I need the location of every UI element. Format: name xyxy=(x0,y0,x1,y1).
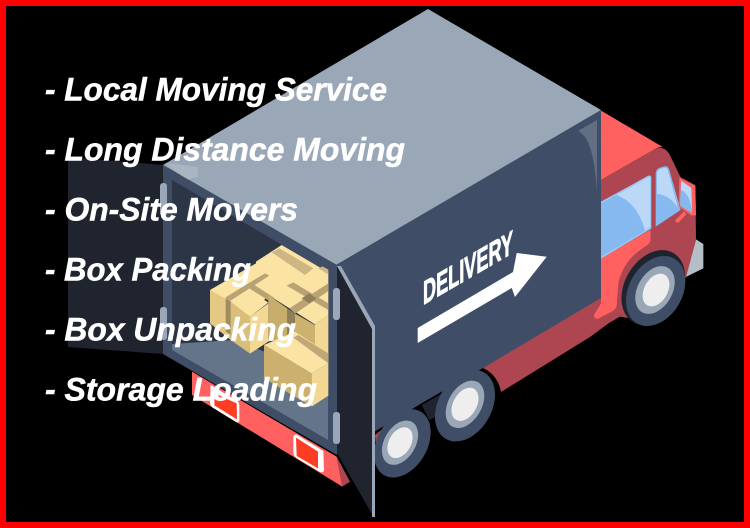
box: left face xyxy=(210,290,231,340)
item: long distance: - Long Distance Moving xyxy=(45,132,405,168)
cargo floor xyxy=(172,340,328,440)
panel highlight xyxy=(578,120,597,192)
box: center faces xyxy=(268,295,287,342)
right open door xyxy=(337,266,375,517)
roof light patch xyxy=(165,163,198,180)
rear wheel front xyxy=(362,399,442,488)
roof xyxy=(163,9,601,265)
side window xyxy=(601,176,651,259)
windshield xyxy=(656,166,681,227)
rear frame xyxy=(163,165,337,455)
cab dark red body xyxy=(590,148,696,334)
rear wheels xyxy=(362,359,507,488)
front wheel xyxy=(609,239,698,337)
cargo box side panel xyxy=(336,110,601,432)
item: box packing: - Box Packing xyxy=(45,252,251,288)
truck cab xyxy=(590,110,703,337)
front bumper xyxy=(685,239,703,277)
door latches xyxy=(160,183,340,444)
box: upper tape xyxy=(272,248,313,275)
delivery label: DELIVERY xyxy=(423,223,513,312)
door edge strip xyxy=(337,266,375,517)
left open door xyxy=(68,157,163,354)
side mirror xyxy=(679,177,696,215)
tail light right xyxy=(293,435,324,472)
item: storage loading: - Storage Loading xyxy=(45,372,317,408)
item: on-site: - On-Site Movers xyxy=(45,192,298,228)
box: lower right xyxy=(264,332,328,407)
rear bumper xyxy=(192,372,350,487)
box: front small xyxy=(231,290,268,354)
cargo interior xyxy=(172,180,328,440)
box: upper top faces xyxy=(210,245,328,324)
item: box unpacking: - Box Unpacking xyxy=(45,312,296,348)
red chassis strip xyxy=(483,290,640,392)
mirror arm xyxy=(675,211,687,223)
tail light left xyxy=(210,385,239,422)
delivery arrow xyxy=(418,253,547,343)
service list xyxy=(45,72,405,408)
cab roof face xyxy=(600,110,663,180)
item: local moving: - Local Moving Service xyxy=(45,72,387,108)
cardboard boxes xyxy=(210,245,328,407)
cab door lower panel xyxy=(594,230,651,319)
rear wheel back xyxy=(423,359,507,452)
